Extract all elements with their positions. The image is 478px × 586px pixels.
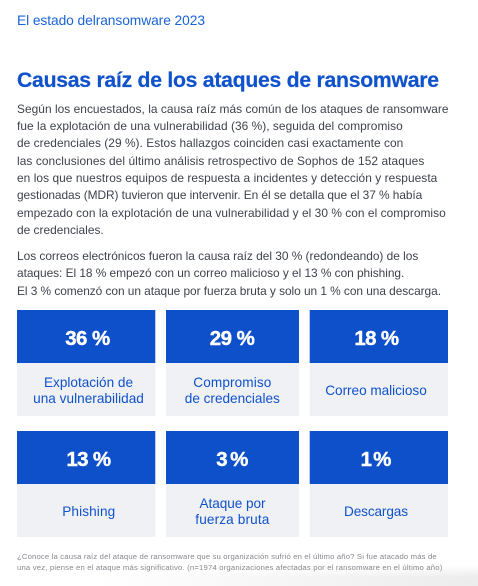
text block: first paragraph: empezado con la explotación de una vulnerabilidad y el 30 % con el compromiso xyxy=(17,206,446,220)
footnote: una vez, piense en el ataque más significativo. (n=1974 organizaciones afectadas por el ransomware en el último año) xyxy=(17,563,443,572)
text block: first paragraph: en los que nuestros equipos de respuesta a incidentes y detección y respuesta xyxy=(17,171,438,185)
header: report name: El estado delransomware 2023 xyxy=(17,13,205,28)
stat card: 29 %: de credenciales xyxy=(185,391,280,406)
stat card: 1 %: 1 % xyxy=(361,448,391,471)
text block: first paragraph: de credenciales (29 %). Estos hallazgos coinciden casi exactamente con xyxy=(17,136,403,150)
stat card: 13 % xyxy=(17,431,155,537)
stat card: 36 %: una vulnerabilidad xyxy=(33,391,144,406)
text block: first paragraph: Según los encuestados, la causa raíz más común de los ataques de ransomware xyxy=(17,102,449,116)
footnote xyxy=(17,552,443,572)
title: Causas raíz de los ataques de ransomware xyxy=(17,69,439,92)
text block: second paragraph: ataques: El 18 % empezó con un correo malicioso y el 13 % con phishing. xyxy=(17,266,404,280)
stat card: 29 %: 29 % xyxy=(210,327,255,350)
text block: first paragraph: fue la explotación de una vulnerabilidad (36 %), seguida del compromiso xyxy=(17,119,403,133)
stat card: 29 %: Compromiso xyxy=(193,375,271,390)
stat card: 3 %: Ataque por xyxy=(200,496,266,511)
stat card: 3 %: fuerza bruta xyxy=(195,512,270,527)
stat card: 13 %: 13 % xyxy=(66,448,111,471)
stat card: 13 %: Phishing xyxy=(62,504,115,519)
stat card: 29 % xyxy=(166,310,299,416)
text block: second paragraph: El 3 % comenzó con un ataque por fuerza bruta y solo un 1 % con una descarga. xyxy=(17,284,441,298)
text block: first paragraph: gestionadas (MDR) tuvieron que intervenir. En él se detalla que el 37 % había xyxy=(17,188,423,202)
stat card: 36 %: Explotación de xyxy=(44,375,133,390)
stat card: 18 % xyxy=(310,310,448,416)
stat card: 3 % xyxy=(166,431,299,537)
text block: second paragraph xyxy=(17,249,441,298)
text block: first paragraph xyxy=(17,102,449,237)
stat card: 1 %: Descargas xyxy=(344,504,408,519)
stat card: 36 % xyxy=(17,310,155,416)
stat card: 36 %: 36 % xyxy=(65,327,110,350)
stat card: 1 % xyxy=(310,431,448,537)
stat card: 3 %: 3 % xyxy=(216,448,248,471)
text block: first paragraph: las conclusiones del último análisis retrospectivo de Sophos de 152 ataques xyxy=(17,154,424,168)
text block: first paragraph: de credenciales. xyxy=(17,223,104,237)
stat card: 18 %: 18 % xyxy=(354,327,399,350)
stat card: 18 %: Correo malicioso xyxy=(325,383,427,398)
text block: second paragraph: Los correos electrónicos fueron la causa raíz del 30 % (redondeando) de los xyxy=(17,249,418,263)
footnote: ¿Conoce la causa raíz del ataque de ransomware que su organización sufrió en el último año? Si fue atacado más de xyxy=(17,552,437,561)
